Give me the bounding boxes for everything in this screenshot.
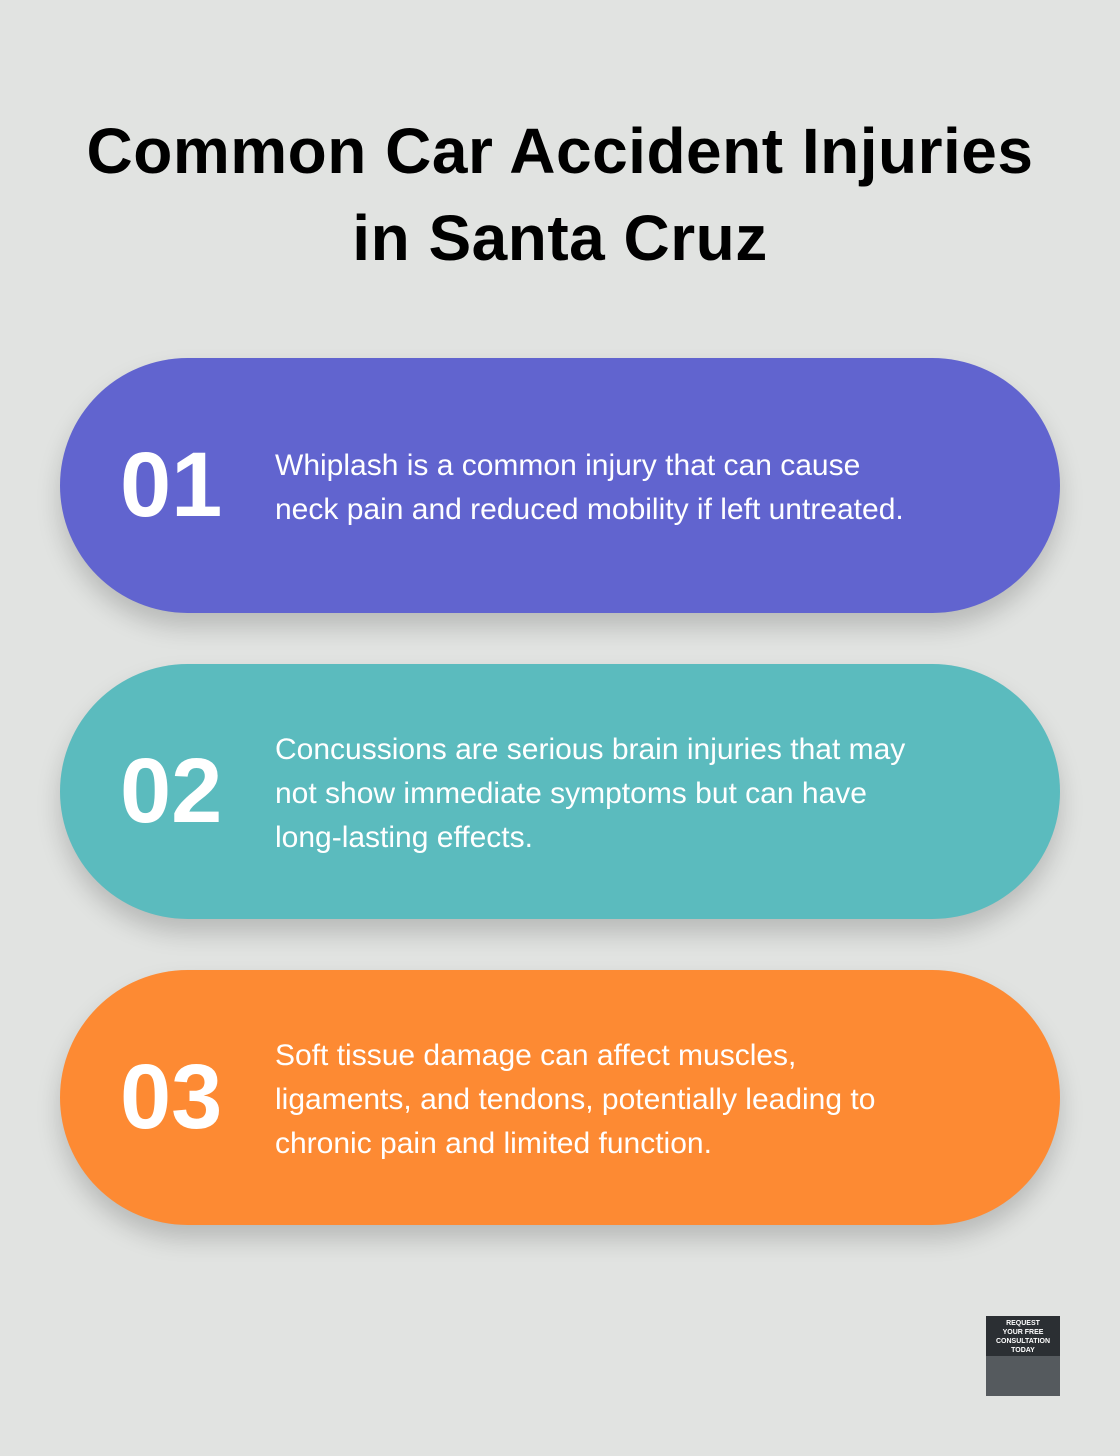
text 02 <box>275 732 906 854</box>
card 01 <box>60 358 1060 613</box>
text 01 <box>275 448 904 526</box>
badge: consultation logo: REQUEST <box>1006 1320 1040 1327</box>
badge: consultation logo: TODAY <box>1011 1347 1035 1354</box>
text 02: Concussions are serious brain injuries that may <box>275 732 905 766</box>
number 02: 02 <box>120 740 222 842</box>
text 01: Whiplash is a common injury that can cause <box>275 448 860 482</box>
text 03: Soft tissue damage can affect muscles, <box>275 1038 796 1072</box>
card 02 <box>60 664 1060 919</box>
title: in Santa Cruz <box>352 202 768 274</box>
number 03: 03 <box>120 1046 222 1148</box>
badge: consultation logo: YOUR FREE <box>1003 1329 1043 1336</box>
title: Common Car Accident Injuries <box>87 115 1033 187</box>
text 02: long-lasting effects. <box>275 820 533 854</box>
text 03: chronic pain and limited function. <box>275 1126 712 1160</box>
text 03: ligaments, and tendons, potentially leading to <box>275 1082 875 1116</box>
text 01: neck pain and reduced mobility if left untreated. <box>275 492 904 526</box>
badge: consultation logo: CONSULTATION <box>996 1338 1050 1345</box>
title <box>87 115 1033 274</box>
badge: consultation logo <box>986 1316 1060 1396</box>
text 03 <box>275 1038 875 1160</box>
card 03 <box>60 970 1060 1225</box>
text 02: not show immediate symptoms but can have <box>275 776 867 810</box>
number 01: 01 <box>120 434 222 536</box>
